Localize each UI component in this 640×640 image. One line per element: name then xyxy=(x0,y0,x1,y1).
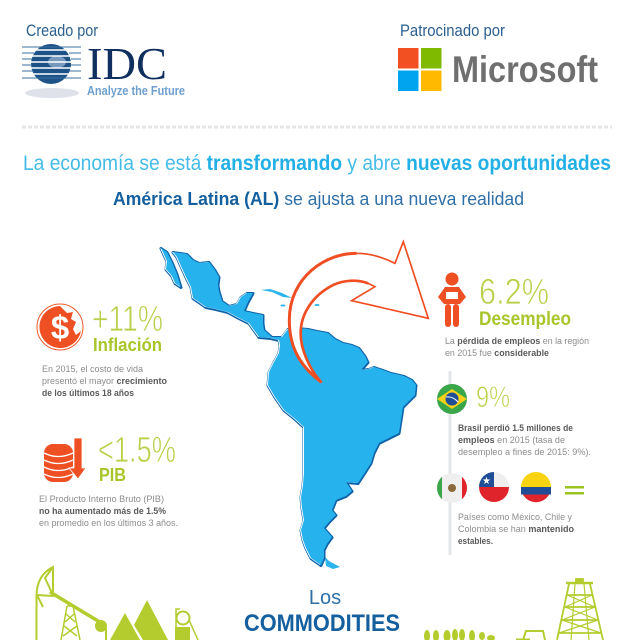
label: desempleo: Desempleo xyxy=(479,309,571,330)
icon: mountains xyxy=(110,600,168,640)
stat: 6.2%: 6.2% xyxy=(479,271,549,312)
icon: flag of Mexico xyxy=(437,473,467,503)
arrow: curved orange xyxy=(289,242,428,383)
icon: equal sign xyxy=(565,486,584,494)
icon: flag of Chile xyxy=(479,472,509,502)
map: Caribbean islands xyxy=(261,289,340,569)
icon: tractor xyxy=(516,631,545,640)
text: paises description xyxy=(458,512,574,547)
label: PIB: PIB xyxy=(99,465,126,485)
heading: patrocinado por: Patrocinado por xyxy=(400,21,505,40)
stat: 9%: 9% xyxy=(476,381,510,414)
text: desempleo description: en 2015 fue considerable xyxy=(445,348,549,359)
panel: Brasil xyxy=(437,381,591,458)
logo: IDC xyxy=(22,38,185,98)
stat: +11%: +11% xyxy=(92,298,163,339)
stat: <1.5%: <1.5% xyxy=(98,429,176,470)
icon: dollar coin: $ xyxy=(51,309,69,346)
title: La economía se está transformando y abre nuevas oportunidades xyxy=(23,152,611,175)
icon: mine hoist xyxy=(175,609,198,640)
map: white coast highlight xyxy=(160,248,415,565)
text: Brasil description xyxy=(458,423,591,458)
text: PIB description: El Producto Interno Bruto (PIB) xyxy=(39,494,164,505)
text: inflacion description: En 2015, el costo de vida xyxy=(42,364,144,375)
logo: Microsoft: Microsoft xyxy=(452,49,598,90)
text: Brasil description: empleos en 2015 (tasa de xyxy=(458,435,565,446)
logo: IDC: Analyze the Future xyxy=(87,84,185,98)
icon: crops xyxy=(424,629,495,640)
icon: flag of Chile: ★ xyxy=(482,476,491,487)
text: paises description: estables. xyxy=(458,536,493,547)
panel: desempleo xyxy=(438,271,589,359)
heading: los commodities: COMMODITIES xyxy=(244,610,400,637)
text: Brasil description: desempleo a fines de 2015: 9%). xyxy=(458,447,591,458)
text: desempleo description: La pérdida de empleos en la región xyxy=(445,336,589,347)
text: Brasil description: Brasil perdió 1.5 millones de xyxy=(458,423,573,434)
panel: paises estables xyxy=(437,472,584,547)
map: dark coast outline xyxy=(161,248,416,566)
text: paises description: Colombia se han mantenido xyxy=(458,524,574,535)
logo: Microsoft xyxy=(398,48,598,91)
logo: IDC: IDC xyxy=(87,38,167,89)
text: paises description: Países como México, Chile y xyxy=(458,512,572,523)
text: PIB description xyxy=(39,494,178,529)
heading: los commodities: Los xyxy=(309,587,341,609)
text: PIB description: no ha aumentado más de 1.5% xyxy=(39,506,166,517)
icon: oil derrick xyxy=(557,579,603,640)
icon: flag of Brazil xyxy=(437,384,467,414)
text: PIB description: en promedio en los últimos 3 años. xyxy=(39,518,178,529)
text: desempleo description xyxy=(445,336,589,359)
map: Latin America xyxy=(160,242,428,569)
icon: oil pumpjack xyxy=(36,567,106,640)
label: inflacion: Inflación xyxy=(93,335,162,355)
icon: person holding box xyxy=(438,272,466,327)
icon: flag of Colombia xyxy=(521,472,551,502)
text: inflacion description: de los últimos 18 años xyxy=(42,388,134,399)
panel: PIB xyxy=(39,429,178,529)
text: inflacion description xyxy=(42,364,167,399)
icon: coins and down arrow xyxy=(44,438,86,482)
subtitle: América Latina (AL) se ajusta a una nueva realidad xyxy=(113,189,524,209)
heading: creado por: Creado por xyxy=(26,21,98,40)
map: land fill xyxy=(161,248,416,565)
panel: inflacion xyxy=(37,298,167,399)
heading: los commodities xyxy=(244,587,400,637)
text: inflacion description: presentó el mayor crecimiento xyxy=(42,376,167,387)
